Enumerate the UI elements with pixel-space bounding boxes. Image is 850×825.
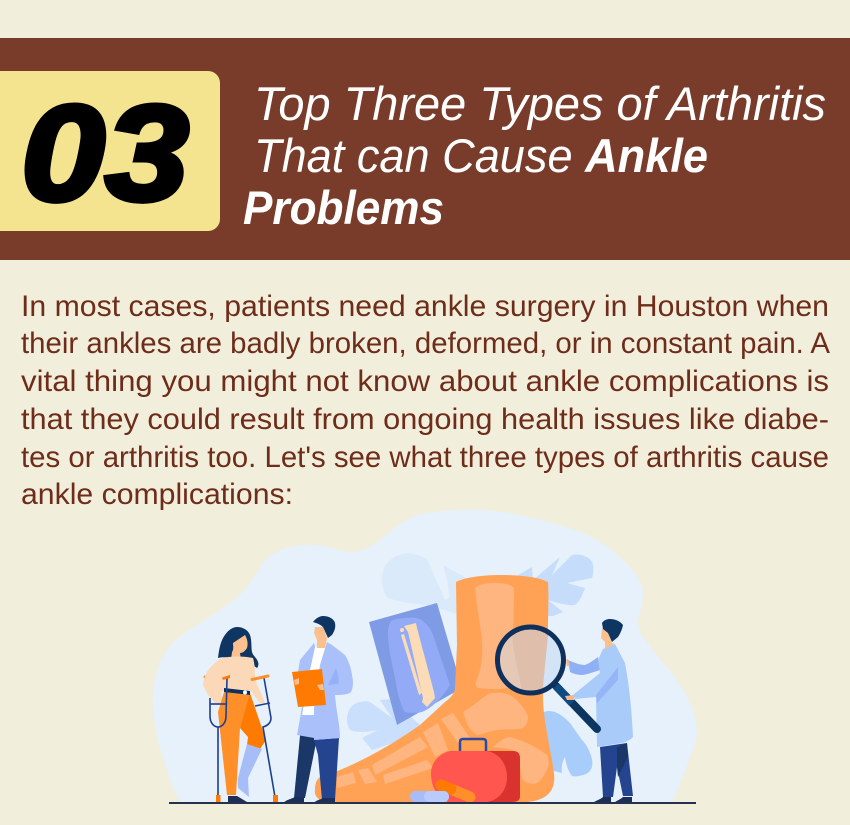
- trousers: [218, 692, 250, 795]
- coat: [573, 644, 633, 747]
- header banner: [0, 38, 850, 260]
- intro paragraph: vital thing you might not know about ankle complications is: [21, 365, 829, 398]
- shoes: [593, 797, 611, 803]
- intro paragraph: [21, 290, 830, 511]
- trousers: [294, 715, 317, 798]
- magnifying glass: [495, 625, 597, 729]
- blue pill: [410, 791, 449, 802]
- woman with crutches: [203, 627, 278, 803]
- crutch tips and handles: [216, 675, 278, 803]
- face and neck: [231, 635, 248, 660]
- head: [314, 627, 327, 648]
- leaf: lower left: [347, 699, 420, 750]
- trousers: [600, 743, 633, 797]
- title: Problems: [243, 181, 444, 234]
- leg cast: [238, 744, 262, 797]
- title: That can Cause Ankle: [254, 129, 708, 182]
- orange pill: [441, 785, 470, 797]
- ground line: [169, 802, 696, 804]
- coat: [297, 643, 315, 738]
- handle: [556, 686, 597, 729]
- right crutch: [255, 678, 275, 797]
- number badge: 03: [21, 77, 189, 229]
- lens: [500, 630, 561, 690]
- background blob: [153, 510, 697, 802]
- title: Top Three Types of Arthritis: [254, 77, 826, 130]
- intro paragraph: that they could result from ongoing health issues like diabe-: [21, 403, 829, 436]
- back crutch handle: [205, 676, 230, 677]
- intro paragraph: tes or arthritis too. Let's see what three types of arthritis cause: [21, 441, 829, 474]
- x-ray film: [369, 603, 462, 725]
- number badge: [0, 71, 220, 231]
- intro paragraph: In most cases, patients need ankle surgery in Houston when: [21, 290, 829, 323]
- head: [601, 628, 615, 649]
- hands: [294, 678, 299, 685]
- foot: [315, 575, 554, 802]
- illustration: ankle examination: [153, 510, 697, 804]
- doctor with magnifying glass: [566, 619, 633, 803]
- hands: [566, 659, 570, 666]
- shoe: [228, 796, 247, 802]
- shirt: [302, 647, 327, 716]
- intro paragraph: ankle complications:: [21, 478, 293, 511]
- shoes: [283, 797, 304, 803]
- left crutch: [210, 678, 227, 797]
- first aid bag: [431, 739, 520, 802]
- ring: [498, 627, 564, 693]
- leaf: lower right: [543, 711, 592, 776]
- leaf: upper left: [382, 553, 470, 615]
- clipboard: [292, 669, 326, 707]
- hand on handle: [565, 695, 574, 700]
- back arm: [568, 657, 600, 675]
- title: [243, 77, 826, 234]
- doctor with clipboard: [283, 616, 353, 803]
- intro paragraph: their ankles are badly broken, deformed, or in constant pain. A: [21, 327, 830, 360]
- hair: [218, 627, 258, 668]
- leaf: upper right: [515, 555, 593, 616]
- belt: [224, 688, 250, 695]
- top: [203, 656, 265, 705]
